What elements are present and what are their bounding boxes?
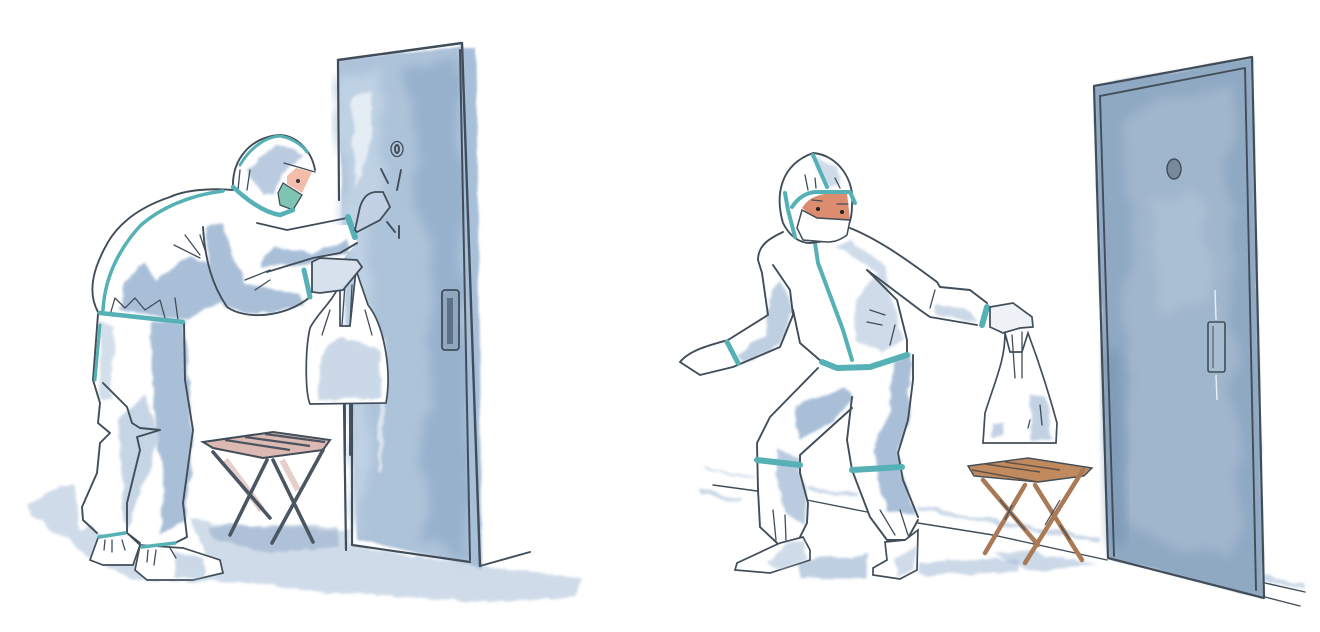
face	[802, 193, 850, 220]
left scene	[28, 43, 582, 602]
floor wash left	[28, 482, 582, 602]
boots	[90, 533, 223, 580]
bag right	[983, 332, 1057, 443]
person knocking	[82, 135, 390, 580]
suit shading	[100, 222, 350, 535]
lower glove	[312, 258, 362, 293]
hood	[233, 135, 315, 215]
door handle	[1208, 322, 1225, 372]
suit base	[680, 228, 990, 543]
stool right	[968, 458, 1092, 563]
suit base	[82, 189, 357, 543]
door handle	[442, 290, 459, 350]
glove right	[990, 303, 1033, 333]
boots	[735, 530, 918, 579]
knock marks	[381, 169, 401, 238]
white mask	[797, 210, 850, 242]
right door	[1094, 57, 1264, 598]
door peephole	[1167, 159, 1181, 179]
left door	[338, 43, 530, 570]
right scene	[680, 57, 1305, 606]
door peephole	[391, 142, 403, 156]
green mask	[278, 183, 302, 210]
suit shading	[735, 240, 978, 525]
face	[287, 168, 312, 193]
stool left	[203, 432, 330, 543]
fist glove	[355, 192, 390, 232]
hood	[780, 153, 855, 243]
floor wash right	[700, 467, 1305, 606]
bag left	[306, 270, 388, 455]
person placing bag	[680, 153, 1033, 579]
